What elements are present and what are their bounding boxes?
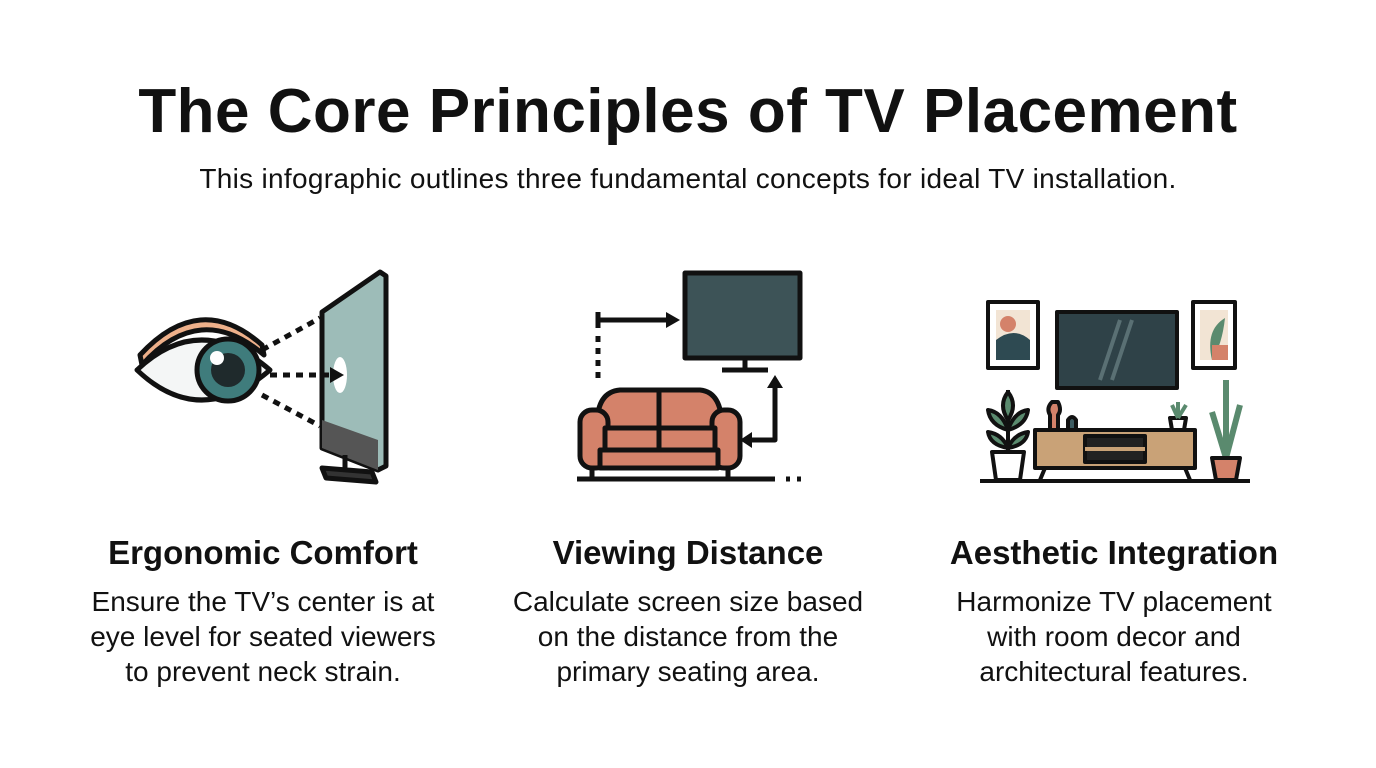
icon: tv, sofa, distance arrows: [577, 273, 801, 479]
subtitle: This infographic outlines three fundamental concepts for ideal TV installation.: [199, 163, 1177, 194]
column: viewing distance: Viewing Distance: [553, 534, 823, 571]
column: ergonomic comfort: to prevent neck strain.: [125, 656, 401, 687]
title: The Core Principles of TV Placement: [138, 77, 1238, 146]
icon: living room: [980, 302, 1250, 481]
column: aesthetic integration: Aesthetic Integration: [950, 534, 1278, 571]
column: ergonomic comfort: eye level for seated viewers: [90, 621, 436, 652]
column: ergonomic comfort: Ergonomic Comfort: [108, 534, 418, 571]
column: viewing distance: Calculate screen size based: [513, 586, 863, 617]
column: aesthetic integration: architectural features.: [979, 656, 1249, 687]
column: aesthetic integration: with room decor and: [987, 621, 1241, 652]
column: ergonomic comfort: [90, 534, 436, 687]
column: ergonomic comfort: Ensure the TV’s center is at: [92, 586, 434, 617]
column: viewing distance: on the distance from the: [538, 621, 838, 652]
column: viewing distance: [513, 534, 863, 687]
column: aesthetic integration: [950, 534, 1278, 687]
column: viewing distance: primary seating area.: [556, 656, 820, 687]
icon: eye and monitor: [137, 272, 386, 482]
column: aesthetic integration: Harmonize TV placement: [956, 586, 1272, 617]
